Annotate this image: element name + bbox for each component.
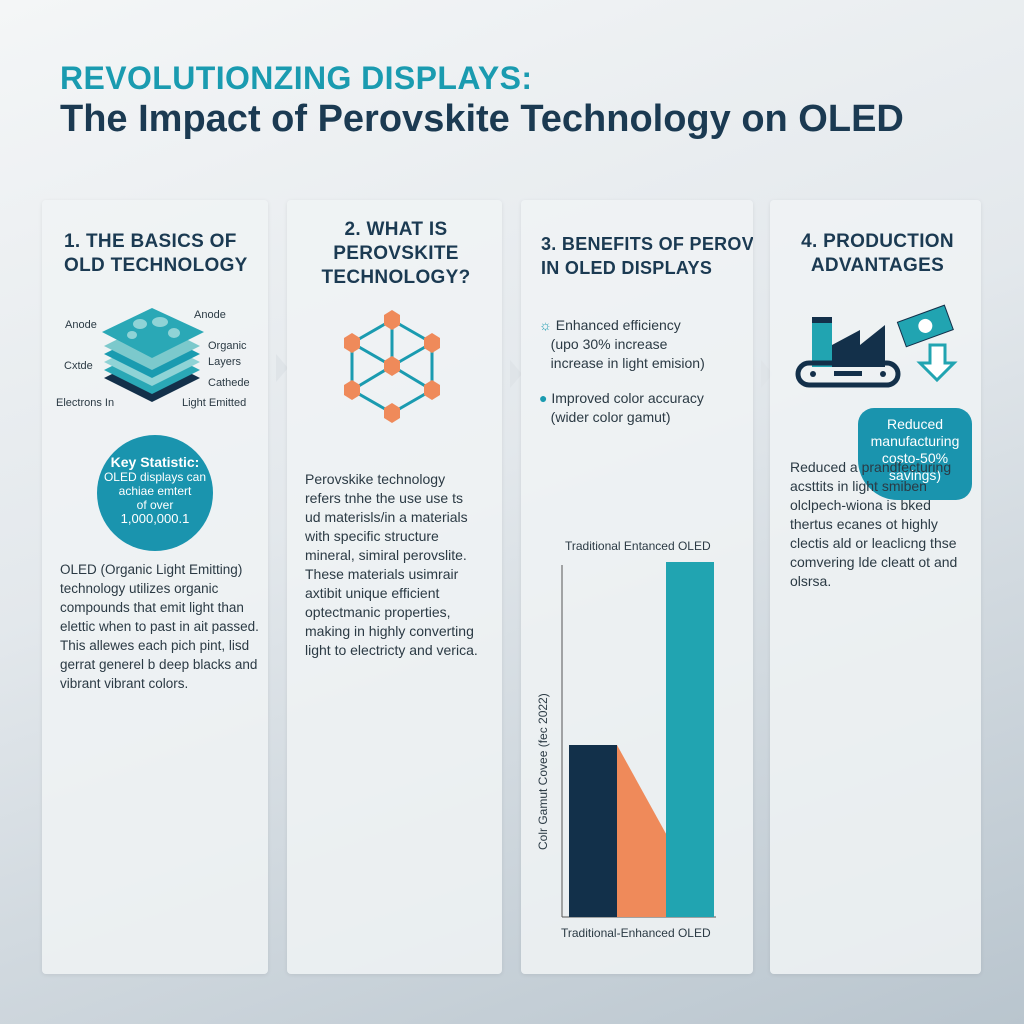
callout: key statistic: Key Statistic: <box>111 454 199 470</box>
heading <box>64 231 248 276</box>
icon: layer stack: Electrons In <box>56 397 114 409</box>
heading <box>322 219 470 288</box>
panel: production <box>770 200 981 974</box>
title <box>60 60 904 140</box>
title: REVOLUTIONZING DISPLAYS: <box>60 60 532 96</box>
bar chart: Colr Gamut Covee (fec 2022) <box>536 693 550 850</box>
bar chart: Traditional-Enhanced OLED <box>561 926 711 940</box>
icon: layer stack <box>56 308 250 409</box>
panel: benefits <box>521 200 753 974</box>
icon: layer stack: Anode <box>65 319 97 331</box>
icon: layer stack: Organic <box>208 340 247 352</box>
text block: OLED (Organic Light Emitting) technology utilizes organic compounds that emit light than elettic when to past in ait passed. This allewes each pich pint, lisd gerrat generel b deep blacks and vibrant vibrant colors. <box>60 562 259 691</box>
heading <box>801 231 954 276</box>
icon: layer stack: Layers <box>208 356 242 368</box>
panel: basics <box>42 200 268 974</box>
icon: layer stack: Light Emitted <box>182 397 246 409</box>
benefit list: (upo 30% increase <box>551 336 667 352</box>
arrow <box>276 354 288 382</box>
heading: 4. PRODUCTION <box>801 231 954 252</box>
heading: OLD TECHNOLOGY <box>64 255 248 276</box>
benefit list: increase in light emision) <box>551 355 705 371</box>
callout bubble: Reduced manufacturing costo-50% savings) <box>871 416 959 483</box>
benefit list: ● Improved color accuracy <box>539 390 704 406</box>
callout: key statistic: 1,000,000.1 <box>121 511 189 526</box>
arrow <box>510 360 522 388</box>
heading: 2. WHAT IS <box>345 219 447 240</box>
panel: perovskite <box>287 200 502 974</box>
text block: Reduced a prandfecturing acsttits in light smiben olclpech-wiona is bked thertus ecanes ot highly clectis ald or leaclicng thse comvering lde cleatt ot and olsrsa. <box>790 459 957 589</box>
callout: key statistic <box>97 435 213 551</box>
heading: 1. THE BASICS OF <box>64 231 237 252</box>
text block: Perovskike technology refers tnhe the use use ts ud materisls/in a materials with specific structure mineral, simiral perovslite. These materials usimrair axtibit unique efficient optectmanic properties, making in highly converting light to electricty and verica. <box>305 471 478 658</box>
arrow <box>761 360 773 388</box>
heading: TECHNOLOGY? <box>322 267 470 288</box>
bar chart <box>536 539 716 940</box>
icon: layer stack: Cxtde <box>64 360 93 372</box>
benefit list: ☼ Enhanced efficiency <box>539 317 681 333</box>
callout: key statistic: of over <box>137 498 173 512</box>
heading: ADVANTAGES <box>811 255 944 276</box>
icon: crystal lattice <box>344 310 440 423</box>
callout: key statistic: achiae emtert <box>119 484 191 498</box>
bar chart: Traditional Entanced OLED <box>565 539 711 553</box>
icon: layer stack: Anode <box>194 309 226 321</box>
benefit list <box>539 317 705 425</box>
heading <box>541 234 753 278</box>
icon: layer stack: Cathede <box>208 377 250 389</box>
title: The Impact of Perovskite Technology on OLED <box>60 98 904 140</box>
callout bubble <box>858 408 972 500</box>
callout: key statistic: OLED displays can <box>104 470 206 484</box>
icon: factory and money <box>796 304 958 388</box>
benefit list: (wider color gamut) <box>551 409 670 425</box>
heading: PEROVSKITE <box>333 243 459 264</box>
heading: IN OLED DISPLAYS <box>541 258 712 278</box>
